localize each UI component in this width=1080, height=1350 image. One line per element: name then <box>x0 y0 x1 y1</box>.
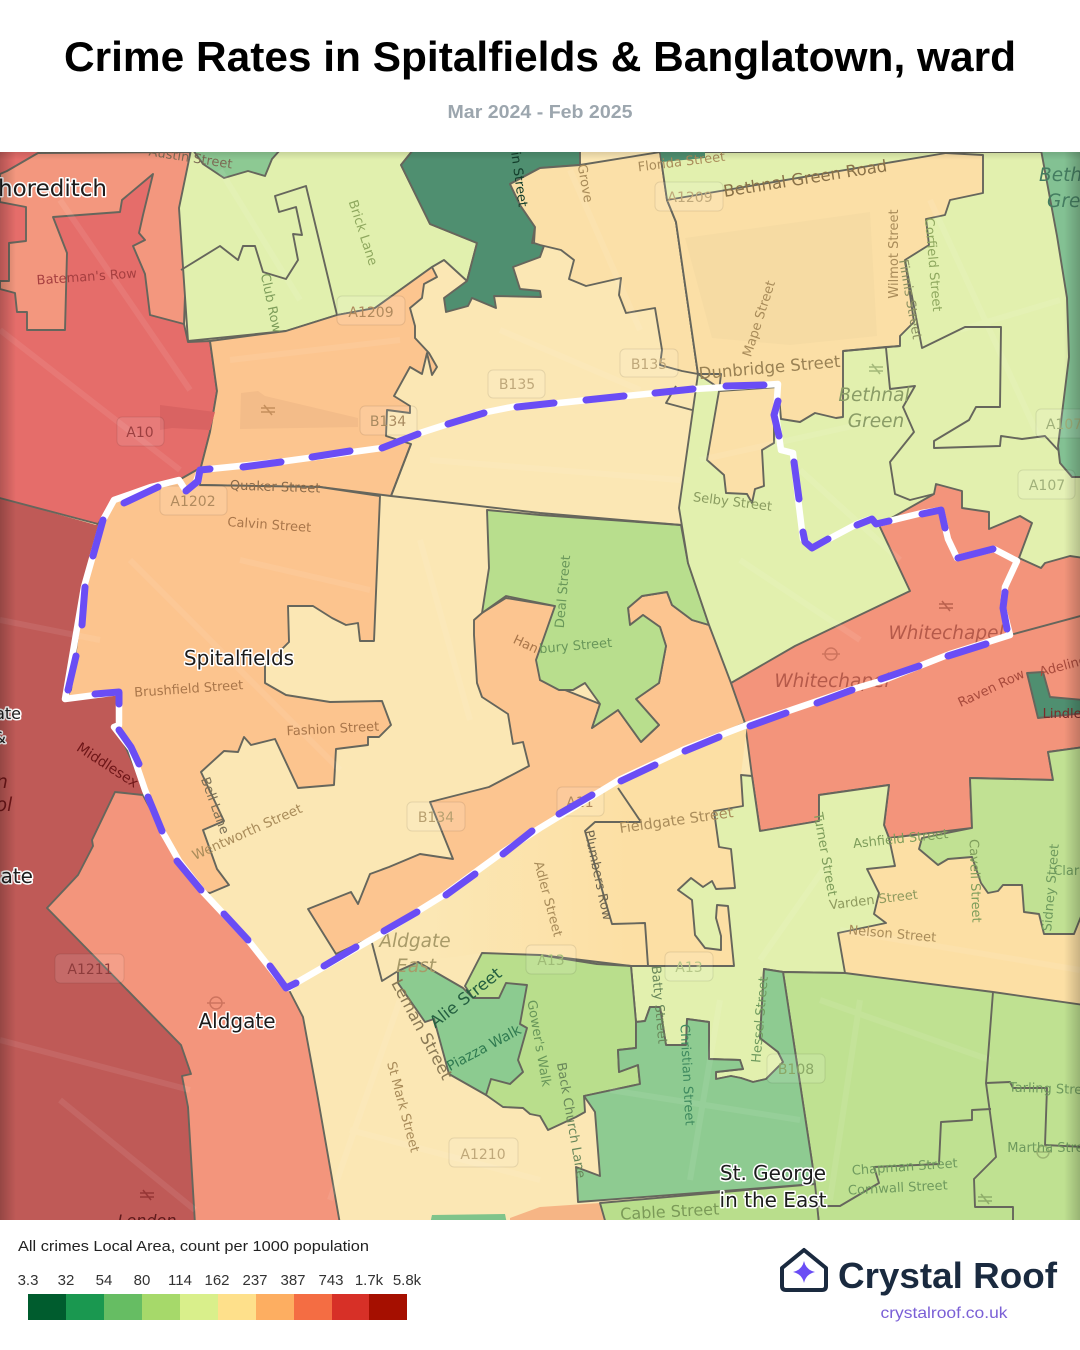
legend value labels: 387 <box>280 1272 306 1289</box>
logo: Crystal Roof <box>782 1250 1058 1322</box>
legend value labels: 743 <box>318 1272 344 1289</box>
label group: east: Finnis Street <box>895 258 924 340</box>
region: green strip east <box>1041 150 1080 477</box>
region: dark red west <box>0 498 200 1220</box>
shield: A13 east: A13 <box>675 960 703 976</box>
icon: house with star <box>782 1250 826 1290</box>
label group: west: Calvin Street <box>227 515 312 536</box>
region: orange Spitalfields <box>65 468 391 893</box>
label group: east: Selby Street <box>692 490 773 515</box>
ward boundary: Spitalfields and Banglatown <box>65 384 1017 988</box>
legend value labels: 54 <box>96 1272 112 1289</box>
area labels italic: Whitechapel <box>888 623 1005 644</box>
region: yellow Selby Street <box>707 387 778 503</box>
road shields <box>55 182 1080 1167</box>
icon: tube Whitechapel <box>822 648 840 660</box>
station icons <box>140 364 1052 1204</box>
legend value labels: 237 <box>242 1272 268 1289</box>
label group: east: Ashfield Street <box>852 827 949 852</box>
label group: centre: in Street <box>507 151 530 208</box>
icon: rail Whitechapel <box>939 601 953 611</box>
region: green Alie Street <box>398 962 527 1095</box>
place: Spitalfields: Spitalfields <box>184 646 294 670</box>
label group: centre: Plumbers Row <box>581 829 614 922</box>
shield: A1202: A1202 <box>170 494 216 510</box>
region: dark green top <box>401 150 580 312</box>
label group: centre: Leman Street <box>387 976 457 1083</box>
area labels italic: Aldgate <box>378 931 451 952</box>
label group: west: Bell Lane <box>197 775 232 836</box>
shield: A11: A11 <box>566 795 594 811</box>
label group: centre: Gower's Walk <box>523 999 554 1088</box>
region: yellow-green Turner Street <box>631 775 895 1082</box>
area labels italic <box>0 165 1080 977</box>
shield: B108: B108 <box>778 1062 814 1078</box>
region: top central yellow <box>510 152 698 374</box>
region: green Christian Street <box>576 969 815 1202</box>
legend value labels: 80 <box>134 1272 150 1289</box>
shield: A107: A107 <box>1029 478 1065 494</box>
map base: pale yellow area <box>52 152 950 1220</box>
shield: A1211: A1211 <box>67 962 113 978</box>
region: salmon Aldgate <box>47 792 340 1224</box>
region: green east of Cavell Street <box>919 747 1080 934</box>
region: green patch at Austin Street <box>193 150 280 178</box>
legend title: All crimes Local Area, count per 1000 population <box>18 1238 369 1255</box>
label group: centre: Alie Street <box>426 963 506 1032</box>
shield: A13: A13 <box>537 953 565 969</box>
label group: east: Raven Row <box>956 667 1028 711</box>
boundary: purple dashes <box>68 385 1007 988</box>
region: dark green notch <box>1027 672 1080 718</box>
label group: east: Nelson Street <box>848 923 937 946</box>
legend value labels: 32 <box>58 1272 74 1289</box>
region: bottom strips <box>430 1184 819 1224</box>
shield: B134 <box>360 406 417 435</box>
legend colour scale <box>28 1294 407 1320</box>
region: salmon Shoreditch <box>0 152 190 330</box>
label group: west <box>36 145 380 864</box>
icon: rail Fenchurch <box>140 1190 154 1200</box>
shield: B108 <box>767 1054 825 1083</box>
shield: A1210 <box>449 1138 518 1167</box>
map edge shadows <box>0 152 1080 1220</box>
label group: centre: Adler Street <box>530 860 565 938</box>
label group: centre: St Mark Street <box>383 1060 422 1154</box>
area labels italic: Whitechapel <box>774 671 891 692</box>
shield: B134 south: B134 <box>418 810 454 826</box>
label group: west: Middlesex <box>73 740 141 791</box>
region: green Gower's Walk <box>465 953 640 1130</box>
label group: west: Quaker Street <box>230 478 321 497</box>
shield: A1209 east <box>655 182 723 211</box>
region: red A10 <box>0 148 217 524</box>
label group: east: Bethnal Green Road <box>722 156 888 201</box>
region: yellow-green east <box>659 152 1080 684</box>
label group: east: London <box>118 1211 176 1230</box>
label group: east: Turner Street <box>810 810 839 897</box>
title: Crime Rates in Spitalfields & Banglatown, ward <box>64 33 1016 80</box>
shield: B134 south <box>407 802 465 831</box>
region: green Hanbury <box>482 510 709 742</box>
label group: east: Sidney Street <box>1040 843 1063 932</box>
shield: B135 east: B135 <box>631 357 667 373</box>
region: yellow south of ward <box>531 728 746 965</box>
label group: centre: Florida Street <box>637 150 726 175</box>
shield: A10 <box>117 417 164 446</box>
label group: centre: Han <box>511 633 540 657</box>
region: pale top-left <box>179 150 477 341</box>
shield: A1209 east: A1209 <box>667 190 713 206</box>
label group: west: Brushfield Street <box>134 678 244 701</box>
shield: B134: B134 <box>370 414 406 430</box>
place name labels <box>0 176 827 1212</box>
place: St. George in the East: St. George <box>720 1161 826 1185</box>
label group: west: Bateman's Row <box>36 267 138 288</box>
shield: A1209 <box>337 296 405 325</box>
icon: tube Shadwell <box>1034 1146 1052 1158</box>
subtitle: date range: Mar 2024 - Feb 2025 <box>448 102 632 122</box>
area labels italic: Green <box>848 411 904 432</box>
place: in the East: in the East <box>720 1188 827 1212</box>
wordmark: Crystal Roof <box>838 1255 1058 1296</box>
area labels italic: Bethnal <box>838 385 910 406</box>
region: orange central <box>308 592 745 954</box>
shield: A11 <box>557 787 604 816</box>
shield: A1210: A1210 <box>460 1147 506 1163</box>
region: orange north of Quaker Street <box>200 267 437 496</box>
place: Aldgate: Aldgate <box>198 1009 276 1033</box>
shield: A1209: A1209 <box>348 305 394 321</box>
label group: east: Corfield Street <box>921 217 944 312</box>
region: salmon Whitechapel <box>731 484 1080 838</box>
website url: crystalroof.co.uk <box>880 1305 1009 1322</box>
boundary: white line <box>65 384 1017 988</box>
legend value labels: 5.8k <box>393 1272 422 1289</box>
shield: A1211 <box>55 954 124 983</box>
label group: centre: Deal Street <box>553 555 574 629</box>
area labels italic: Gre <box>1047 191 1080 212</box>
label group: west: Wentworth Street <box>190 801 305 864</box>
shield: A13 east <box>665 952 713 981</box>
legend value labels <box>18 1272 422 1289</box>
boundary lines <box>181 186 1080 1224</box>
shield: A107 north <box>1036 409 1080 438</box>
label group: east: Cornwall Street <box>848 1178 948 1199</box>
label group: centre: Grove <box>574 163 595 204</box>
label group: centre <box>383 150 772 1179</box>
region: dark green sliver at top <box>660 152 705 162</box>
label group: east: Chapman Street <box>851 1156 958 1179</box>
legend value labels: 1.7k <box>355 1272 384 1289</box>
legend value labels: 162 <box>204 1272 230 1289</box>
shield: A107 <box>1018 470 1075 499</box>
area labels italic: East <box>396 956 437 977</box>
label group: west: Brick Lane <box>345 198 380 268</box>
label group: centre: Christian Street <box>676 1024 697 1126</box>
label group: east: Mape Street <box>740 279 779 359</box>
label group: east: Dunbridge Street <box>698 352 842 383</box>
label group: west: Club Row <box>257 272 284 335</box>
label group: west: Fashion Street <box>286 720 379 739</box>
icon: rail Bethnal Green <box>869 364 883 374</box>
legend value labels: 114 <box>168 1272 192 1289</box>
shield: A1202 <box>160 486 227 515</box>
shield: B135: B135 <box>499 377 535 393</box>
shield: B135 east <box>620 349 678 377</box>
shield: A13 <box>526 945 576 974</box>
park shade <box>685 212 877 345</box>
shield: A10: A10 <box>126 425 154 441</box>
icon: rail Shoreditch High Street <box>261 405 275 415</box>
region: yellow north of Dunbridge Street <box>667 153 983 422</box>
label group: east <box>118 156 1080 1230</box>
label group: centre: Hessel Street <box>749 976 772 1063</box>
label group: east: Cable Street <box>620 1199 720 1224</box>
station buildings <box>160 391 358 430</box>
label group: east: Wilmot Street <box>887 209 902 299</box>
label group: centre: Back Church Lane <box>553 1061 588 1179</box>
region: green Bigland Street <box>783 972 1080 1224</box>
label group: west: Austin Street <box>148 145 233 173</box>
label group: centre: Batty Street <box>648 965 669 1044</box>
region: yellow Nelson Street <box>838 838 1080 1005</box>
label group: centre: bury Street <box>539 636 613 657</box>
icon: tube Aldgate <box>207 997 225 1009</box>
legend value labels: 3.3 <box>18 1272 38 1289</box>
label group: centre: Fieldgate Street <box>618 805 735 837</box>
icon: rail Shadwell <box>978 1194 992 1204</box>
label group: centre: Piazza Walk <box>444 1022 525 1075</box>
label group: east: Varden Street <box>828 888 919 913</box>
legend <box>18 1238 422 1320</box>
shield: B135 <box>488 370 545 398</box>
label group: east: Cavell Street <box>966 839 983 923</box>
roads texture <box>0 173 941 1212</box>
